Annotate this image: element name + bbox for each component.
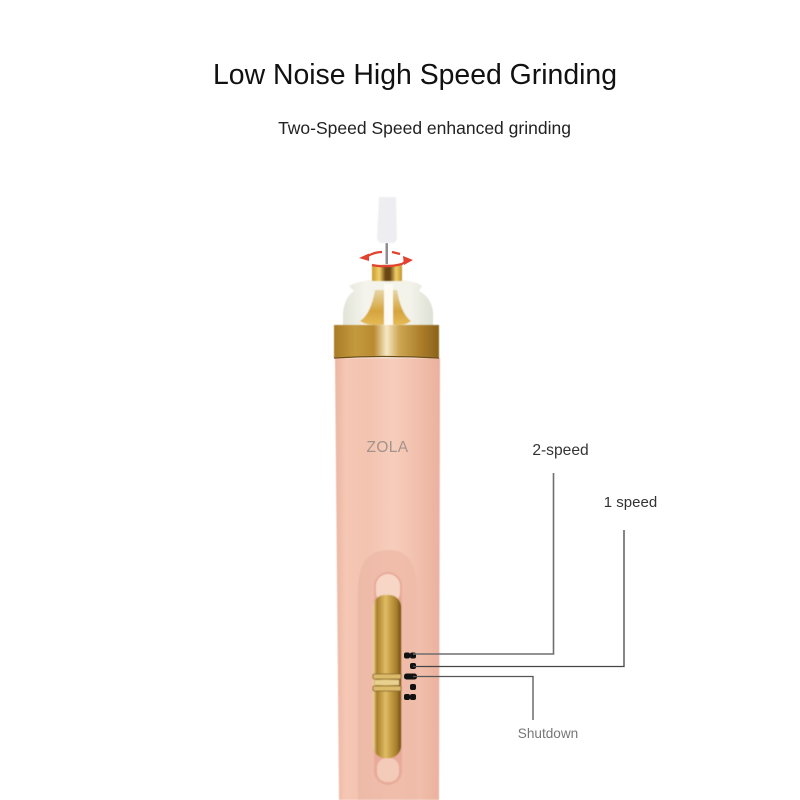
title: Low Noise High Speed Grinding <box>213 59 617 91</box>
label: 2-speed: 2-speed <box>532 442 589 459</box>
drill shaft <box>386 243 388 264</box>
pen body <box>335 358 440 800</box>
gold ring <box>334 325 439 358</box>
label: shutdown: Shutdown <box>518 726 578 741</box>
leader line: 1 speed <box>413 530 624 666</box>
rotation arrows <box>359 252 413 266</box>
leader line: 2-speed <box>413 473 554 654</box>
glass collar <box>343 279 433 327</box>
leader line: shutdown <box>413 676 533 720</box>
gold neck <box>372 265 402 281</box>
label: 1 speed: 1 speed <box>604 494 657 511</box>
speed indicator dots <box>404 652 417 700</box>
ceramic drill bit <box>377 197 397 243</box>
gold slider switch <box>373 595 401 758</box>
brand logo: ZOLA <box>366 439 409 456</box>
subtitle: Two-Speed Speed enhanced grinding <box>278 118 571 138</box>
